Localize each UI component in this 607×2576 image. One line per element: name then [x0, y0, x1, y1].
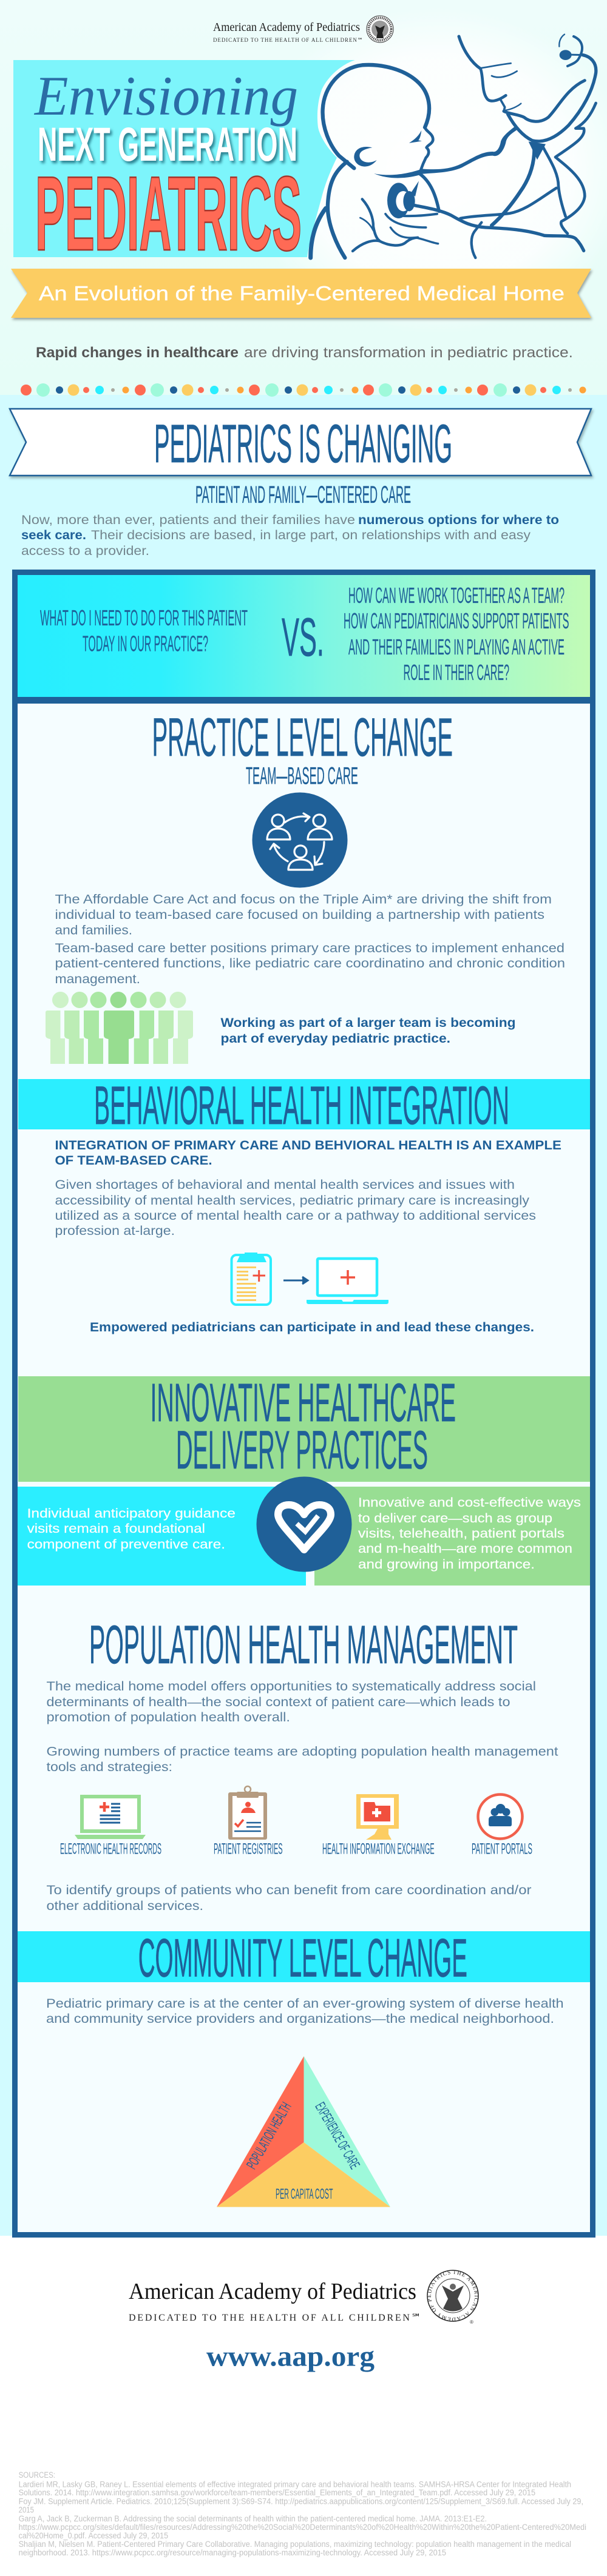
community paragraph: Pediatric primary care is at the center of an ever-growing system of diverse health	[46, 1997, 564, 2011]
practice level paragraph: Team-based care better positions primary care practices to implement enhanced	[55, 941, 565, 955]
intro sentence: are driving transformation in pediatric practice.	[244, 345, 573, 361]
intro sentence	[36, 345, 573, 361]
practice level paragraph: patient-centered functions, like pediatric care coordinatino and chronic condition	[55, 957, 565, 970]
behavioral health paragraph: utilized as a source of mental health care or a pathway to additional services	[55, 1209, 536, 1223]
panel: anticipatory guidance: Individual anticipatory guidance	[27, 1507, 236, 1521]
panel: anticipatory guidance: visits remain a foundational	[27, 1522, 205, 1536]
text: TEAM—BASED CARE	[246, 763, 358, 790]
main bordered panel	[15, 573, 592, 2235]
practice level paragraph: individual to team-based care focused on building a partnership with patients	[55, 908, 544, 922]
team callout: part of everyday pediatric practice.	[221, 1032, 450, 1046]
text: HEALTH INFORMATION EXCHANGE	[322, 1840, 435, 1857]
sources: Foy JM. Supplement Article. Pediatrics. 2010;125(Supplement 3):S69-S74. http://pediatrics.aappublications.org/content/125/Supplement_3/S69.full. Accessed July 29,	[19, 2497, 583, 2506]
sources: Garg A, Jack B, Zuckerman B. Addressing the social determinants of health within the patient-centered medical home. JAMA. 2013:E1-E2.	[19, 2514, 487, 2523]
arrow	[283, 1277, 308, 1284]
top logo: American Academy of Pediatrics: DEDICATED TO THE HEALTH OF ALL CHILDREN℠	[213, 37, 363, 43]
footer logo: American Academy of Pediatrics: DEDICATED TO THE HEALTH OF ALL CHILDREN℠	[129, 2313, 421, 2323]
practice level paragraph: management.	[55, 972, 140, 986]
population health paragraph: promotion of population health overall.	[46, 1710, 290, 1724]
practice level paragraph: and families.	[55, 923, 132, 938]
population health closing text: other additional services.	[46, 1899, 203, 1913]
behavioral health paragraph: accessibility of mental health services, pediatric primary care is increasingly	[55, 1194, 530, 1208]
behavioral health lead-in: INTEGRATION OF PRIMARY CARE AND BEHVIORAL HEALTH IS AN EXAMPLE	[55, 1138, 561, 1152]
subtitle ribbon: An Evolution of the Family-Centered Medical Home	[39, 282, 565, 304]
top logo: American Academy of Pediatrics: American Academy of Pediatrics	[213, 21, 360, 34]
sources: Shaljian M, Nielsen M. Patient-Centered Primary Care Collaborative. Managing populations, maximizing technology: population health management in the medical	[19, 2540, 571, 2549]
icon: heart with check	[256, 1476, 352, 1572]
subtitle ribbon	[11, 269, 591, 318]
text: ELECTRONIC HEALTH RECORDS	[60, 1840, 161, 1857]
panel: anticipatory guidance	[18, 1487, 306, 1586]
panel: anticipatory guidance: component of preventive care.	[27, 1538, 225, 1552]
behavioral health paragraph: profession at-large.	[55, 1224, 175, 1238]
behavioral health paragraph: Given shortages of behavioral and mental health services and issues with	[55, 1178, 515, 1192]
ribbon: Pediatrics is changing	[10, 409, 591, 476]
panel: comparison questions	[18, 575, 590, 697]
triple aim triangle: PER CAPITA COST	[276, 2186, 333, 2202]
footer logo: American Academy of Pediatrics: American Academy of Pediatrics	[129, 2279, 416, 2304]
intro paragraph: numerous options for where to	[358, 513, 559, 527]
icon: health information exchange	[322, 1794, 435, 1857]
team callout	[221, 1016, 516, 1046]
practice level paragraph	[55, 893, 565, 986]
seal: THE AMERICAN ACADEMY OF PEDIATRICS	[427, 2271, 478, 2321]
sources: Solutions. 2014. http://www.integration.samhsa.gov/workforce/team-members/Essential_Elements_of_an_Integrated_Team.pdf. Accessed July 29, 2015	[19, 2488, 535, 2497]
community paragraph: and community service providers and organizations—the medical neighborhood.	[46, 2012, 554, 2026]
triple aim triangle	[217, 2056, 390, 2207]
sources: cal%20Home_0.pdf. Accessed July 29, 2015	[19, 2531, 168, 2540]
population health paragraph: Growing numbers of practice teams are adopting population health management	[46, 1744, 558, 1759]
intro paragraph: seek care.	[21, 528, 86, 542]
panel: comparison questions: VS.	[282, 607, 324, 667]
panel: cost-effective care: and m-health—are more common	[358, 1542, 572, 1556]
website url: www.aap.org	[206, 2341, 375, 2373]
population health paragraph: The medical home model offers opportunities to systematically address social	[46, 1680, 536, 1693]
sources: https://www.pcpcc.org/sites/default/files/resources/Addressing%20the%20Social%20Determinants%20of%20Health%20Within%20the%20Patient-Centered%20Medi	[19, 2523, 586, 2532]
left question	[40, 605, 248, 656]
left question: TODAY IN OUR PRACTICE?	[83, 631, 208, 656]
panel: cost-effective care: and growing in importance.	[358, 1558, 535, 1572]
panel: cost-effective care: Innovative and cost-effective ways	[358, 1496, 581, 1510]
behavioral health lead-in: OF TEAM-BASED CARE.	[55, 1154, 212, 1168]
icon: row of green people	[46, 992, 193, 1064]
icon: team cycle	[253, 792, 347, 888]
text: PATIENT REGISTRIES	[214, 1840, 283, 1857]
right question	[344, 583, 569, 685]
intro sentence: Rapid changes in healthcare	[36, 345, 239, 361]
sources: neighborhood. 2013. https://www.pcpcc.org/resource/managing-populations-maximizing-technology. Accessed July 29, 2015	[19, 2548, 446, 2557]
team callout: Working as part of a larger team is becoming	[221, 1016, 516, 1030]
icon: patient registries	[214, 1786, 283, 1857]
title: Envisioning: Envisioning	[33, 65, 298, 127]
triple aim triangle: EXPERIENCE OF CARE	[311, 2100, 363, 2172]
triangle label: population health: POPULATION HEALTH	[243, 2100, 295, 2172]
top logo: American Academy of Pediatrics	[213, 16, 393, 43]
seal: ®	[470, 2319, 473, 2325]
text: PATIENT PORTALS	[472, 1840, 532, 1857]
sources: SOURCES:	[19, 2470, 55, 2480]
population health closing text	[46, 1883, 532, 1913]
title: Next Generation: NEXT GENERATION	[38, 117, 297, 171]
clipboard	[232, 1253, 271, 1305]
title panel: cyan background with baby silhouette edge	[13, 60, 355, 257]
intro paragraph: access to a provider.	[21, 544, 149, 558]
sources: Lardieri MR, Lasky GB, Raney L. Essential elements of effective integrated primary care and behavioral health teams. SAMHSA-HRSA Center for Integrated Health	[19, 2480, 571, 2489]
icon: patient portals	[472, 1794, 532, 1857]
panel: comparison questions: WHAT DO I NEED TO DO FOR THIS PATIENT	[40, 605, 248, 630]
practice level paragraph: The Affordable Care Act and focus on the Triple Aim* are driving the shift from	[55, 893, 552, 906]
population health paragraph: determinants of health—the social context of patient care—which leads to	[46, 1695, 510, 1709]
panel: cost-effective care: to deliver care—such as group	[358, 1512, 552, 1525]
intro paragraph: Their decisions are based, in large part, on relationships with and easy	[91, 528, 531, 542]
illustration: baby and mother with stethoscope	[311, 35, 596, 258]
panel: cost-effective care	[314, 1487, 590, 1586]
band heading: innovative healthcare delivery practices	[18, 1372, 590, 1482]
dot divider	[21, 383, 586, 397]
intro paragraph	[21, 513, 559, 558]
population health paragraph: tools and strategies:	[46, 1760, 172, 1774]
sources: 2015	[19, 2505, 34, 2515]
icon: electronic health records	[60, 1797, 161, 1857]
sources	[19, 2470, 586, 2557]
panel: cost-effective care: visits, telehealth, patient portals	[358, 1527, 565, 1541]
population health closing text: To identify groups of patients who can benefit from care coordination and/or	[46, 1883, 532, 1897]
empowered callout: Empowered pediatricians can participate in and lead these changes.	[90, 1320, 534, 1334]
population health paragraph	[46, 1680, 558, 1774]
intro paragraph: Now, more than ever, patients and their families have	[21, 513, 355, 527]
footer logo: American Academy of Pediatrics	[129, 2270, 479, 2325]
behavioral health paragraph	[55, 1178, 536, 1238]
behavioral health lead-in	[55, 1138, 561, 1168]
laptop	[307, 1259, 388, 1304]
icon: clipboard to laptop	[232, 1253, 388, 1305]
community paragraph	[46, 1997, 564, 2026]
